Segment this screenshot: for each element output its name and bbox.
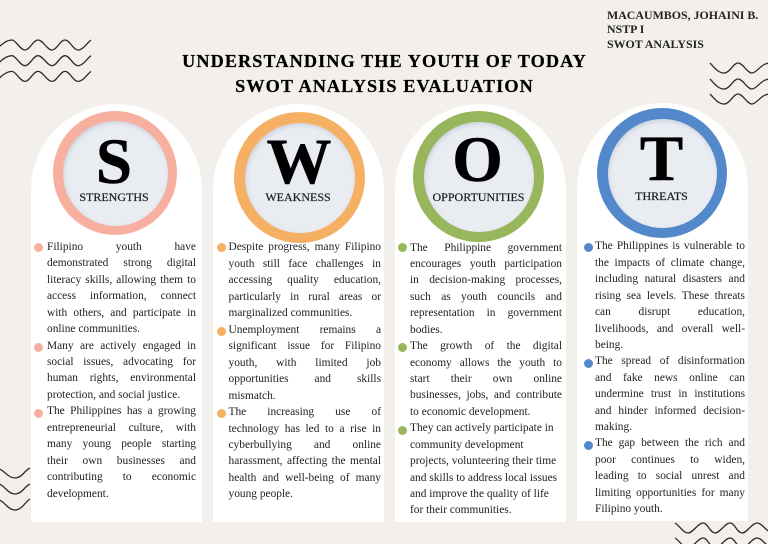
- threats text: [595, 240, 745, 515]
- bullet list: opportunities: [398, 242, 562, 516]
- opportunities text: in decision-making processes,: [410, 274, 562, 286]
- weakness text: Unemployment remains a: [228, 324, 381, 336]
- bullet dot 2: [34, 342, 43, 352]
- weakness text: cyberbullying and online: [228, 439, 381, 451]
- letter S: S: [96, 126, 132, 198]
- opportunities text: for their communities.: [410, 504, 512, 516]
- bullet dot 2: [584, 359, 592, 368]
- weakness text: significant issue for Filipino: [228, 340, 381, 352]
- opportunities text: projects, volunteering their time: [410, 455, 556, 467]
- opportunities text: The growth of the digital: [410, 340, 562, 352]
- label: threats: THREATS: [635, 189, 688, 203]
- strengths text: protection, and social justice.: [47, 389, 180, 401]
- opportunities text: and improve the quality of life: [410, 488, 549, 500]
- label: weakness: WEAKNESS: [265, 190, 331, 204]
- weakness text: accessing quality education,: [228, 274, 381, 286]
- bullet dot 3: [34, 409, 43, 418]
- letter T: T: [640, 123, 683, 195]
- threats text: including natural disasters and: [595, 273, 745, 285]
- icon: O circle: [413, 111, 544, 242]
- threats text: poor continues to widen,: [595, 454, 745, 466]
- weakness text: mismatch.: [228, 390, 276, 402]
- icon: S circle: [53, 111, 177, 235]
- threats text: and hinder informed decision-: [595, 405, 745, 417]
- bullet dot 1: [584, 242, 592, 252]
- opportunities text: bodies.: [410, 324, 443, 336]
- opportunities text: economy allows the youth to: [410, 357, 562, 369]
- strengths text: social issues, advocating for: [47, 356, 196, 368]
- weakness text: youth still face challenges in: [228, 258, 381, 270]
- author block: MACAUMBOS, JOHAINI B.: [607, 8, 758, 22]
- threats text: The gap between the rich and: [595, 437, 745, 449]
- opportunities text: start their own online: [410, 373, 562, 385]
- threats text: the impacts of climate change,: [595, 257, 745, 269]
- opportunities text: and skills to address local issues: [410, 472, 557, 484]
- bullet dot 1: [34, 243, 43, 252]
- bullet dot 1: [216, 243, 226, 252]
- strengths text: their own businesses and: [47, 455, 196, 467]
- title: [182, 51, 587, 96]
- threats text: being.: [595, 339, 623, 351]
- label: opportunities: OPPORTUNITIES: [433, 190, 524, 204]
- bullet dot 3: [216, 409, 226, 418]
- opportunities text: such as youth councils and: [410, 291, 562, 303]
- bullet dot 3: [398, 426, 407, 435]
- strengths text: online communities.: [47, 323, 140, 335]
- threats text: limiting opportunities for many: [595, 487, 745, 499]
- weakness text: harassment, affecting the mental: [228, 455, 381, 467]
- bullet list: strengths: [34, 241, 196, 500]
- weakness text: young people.: [228, 488, 293, 500]
- author block: SWOT ANALYSIS: [607, 37, 704, 51]
- opportunities text: [410, 242, 562, 516]
- threats text: making.: [595, 421, 632, 433]
- strengths text: [47, 241, 196, 500]
- weakness text: youth, with limited job: [228, 357, 381, 369]
- opportunities text: businesses, jobs, and contribute: [410, 389, 562, 401]
- icon: W circle: [234, 112, 365, 243]
- opportunities text: representation in government: [410, 307, 562, 319]
- weakness text: The increasing use of: [228, 406, 381, 418]
- strengths text: many young people starting: [47, 438, 196, 450]
- strengths text: Filipino youth have: [47, 241, 196, 253]
- threats text: The Philippines is vulnerable to: [595, 240, 745, 252]
- weakness text: technology has led to a rise in: [228, 423, 381, 435]
- weakness text: [228, 241, 382, 500]
- opportunities text: The Philippine government: [410, 242, 562, 254]
- strengths text: access information, connect: [47, 290, 196, 302]
- strengths text: human rights, environmental: [47, 372, 196, 384]
- strengths text: demonstrated strong digital: [47, 257, 196, 269]
- strengths text: with others, and participate in: [47, 307, 196, 319]
- threats text: rising sea levels. These threats: [595, 290, 745, 302]
- opportunities text: encourages youth participation: [410, 258, 562, 270]
- bullet dot 2: [398, 342, 407, 352]
- opportunities text: community development: [410, 439, 524, 451]
- label: strengths: STRENGTHS: [79, 190, 149, 204]
- strengths text: The Philippines has a growing: [47, 405, 196, 417]
- threats text: The spread of disinformation: [595, 355, 745, 367]
- panel: opportunities: [394, 104, 566, 522]
- strengths text: entrepreneurial culture, with: [47, 422, 196, 434]
- opportunities text: They can actively participate in: [410, 422, 554, 434]
- bullet dot 1: [398, 243, 407, 252]
- threats text: Filipino youth.: [595, 503, 663, 515]
- bullet list: weakness: [217, 241, 382, 500]
- weakness text: marginalized communities.: [228, 307, 352, 319]
- threats text: livelihoods, and overall well-: [595, 322, 745, 334]
- title: UNDERSTANDING THE YOUTH OF TODAY: [182, 51, 587, 71]
- bullet dot 2: [216, 327, 226, 336]
- author block: NSTP I: [607, 22, 644, 36]
- weakness text: particularly in rural areas or: [228, 291, 381, 303]
- weakness text: opportunities and skills: [228, 373, 381, 385]
- opportunities text: to economic development.: [410, 406, 531, 418]
- weakness text: health and well-being of many: [228, 472, 381, 484]
- threats text: and fake news online can: [595, 372, 745, 384]
- panel: weakness: [213, 104, 384, 522]
- threats text: undermine trust in institutions: [595, 388, 745, 400]
- bullet dot 3: [584, 440, 592, 450]
- threats text: leading to social unrest and: [595, 470, 745, 482]
- panel: strengths: [31, 104, 202, 522]
- threats text: can disrupt education,: [595, 306, 745, 318]
- strengths text: contributing to economic: [47, 471, 196, 483]
- panel: threats: [576, 103, 748, 521]
- weakness text: Despite progress, many Filipino: [228, 241, 381, 253]
- letter O: O: [452, 124, 503, 196]
- strengths text: Many are actively engaged in: [47, 340, 196, 352]
- strengths text: development.: [47, 488, 109, 500]
- letter W: W: [266, 126, 332, 198]
- strengths text: literacy skills, allowing them to: [47, 274, 196, 286]
- icon: T circle: [597, 108, 727, 238]
- title: SWOT ANALYSIS EVALUATION: [235, 76, 534, 96]
- author block: [607, 8, 758, 51]
- bullet list: threats: [584, 240, 745, 515]
